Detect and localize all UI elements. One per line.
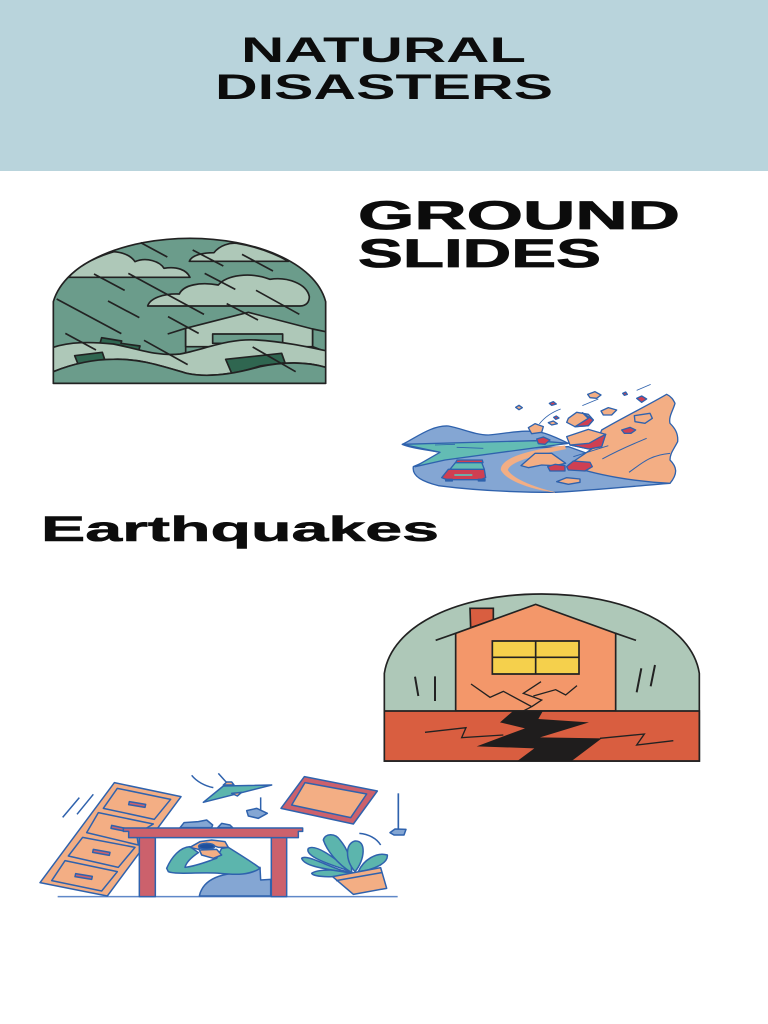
icon: rainstorm over flooded house	[53, 238, 326, 383]
heading: ground slides: SLIDES	[358, 232, 601, 276]
person	[199, 867, 271, 896]
header band	[0, 0, 768, 171]
big boulder	[567, 429, 606, 449]
heading: ground slides	[358, 194, 680, 276]
picture frame	[281, 777, 377, 824]
heading: ground slides: GROUND	[358, 194, 680, 238]
car	[442, 460, 486, 481]
filing cabinet	[40, 783, 181, 896]
rubble on table	[180, 820, 233, 828]
hanging lamp	[203, 785, 272, 802]
hillside	[568, 394, 678, 483]
falling rubble	[396, 793, 401, 829]
ground fissure	[477, 711, 602, 761]
icon: house with cracked ground	[384, 594, 699, 761]
icon: person sheltering under table	[40, 773, 406, 897]
icon: landslide onto road with car	[402, 384, 678, 492]
heading: earthquakes: Earthquakes	[41, 510, 439, 549]
potted plant	[302, 835, 387, 877]
floor line	[58, 894, 398, 899]
title: DISASTERS	[215, 68, 553, 107]
table	[139, 837, 287, 897]
title: NATURAL	[241, 31, 526, 70]
title	[215, 31, 553, 107]
